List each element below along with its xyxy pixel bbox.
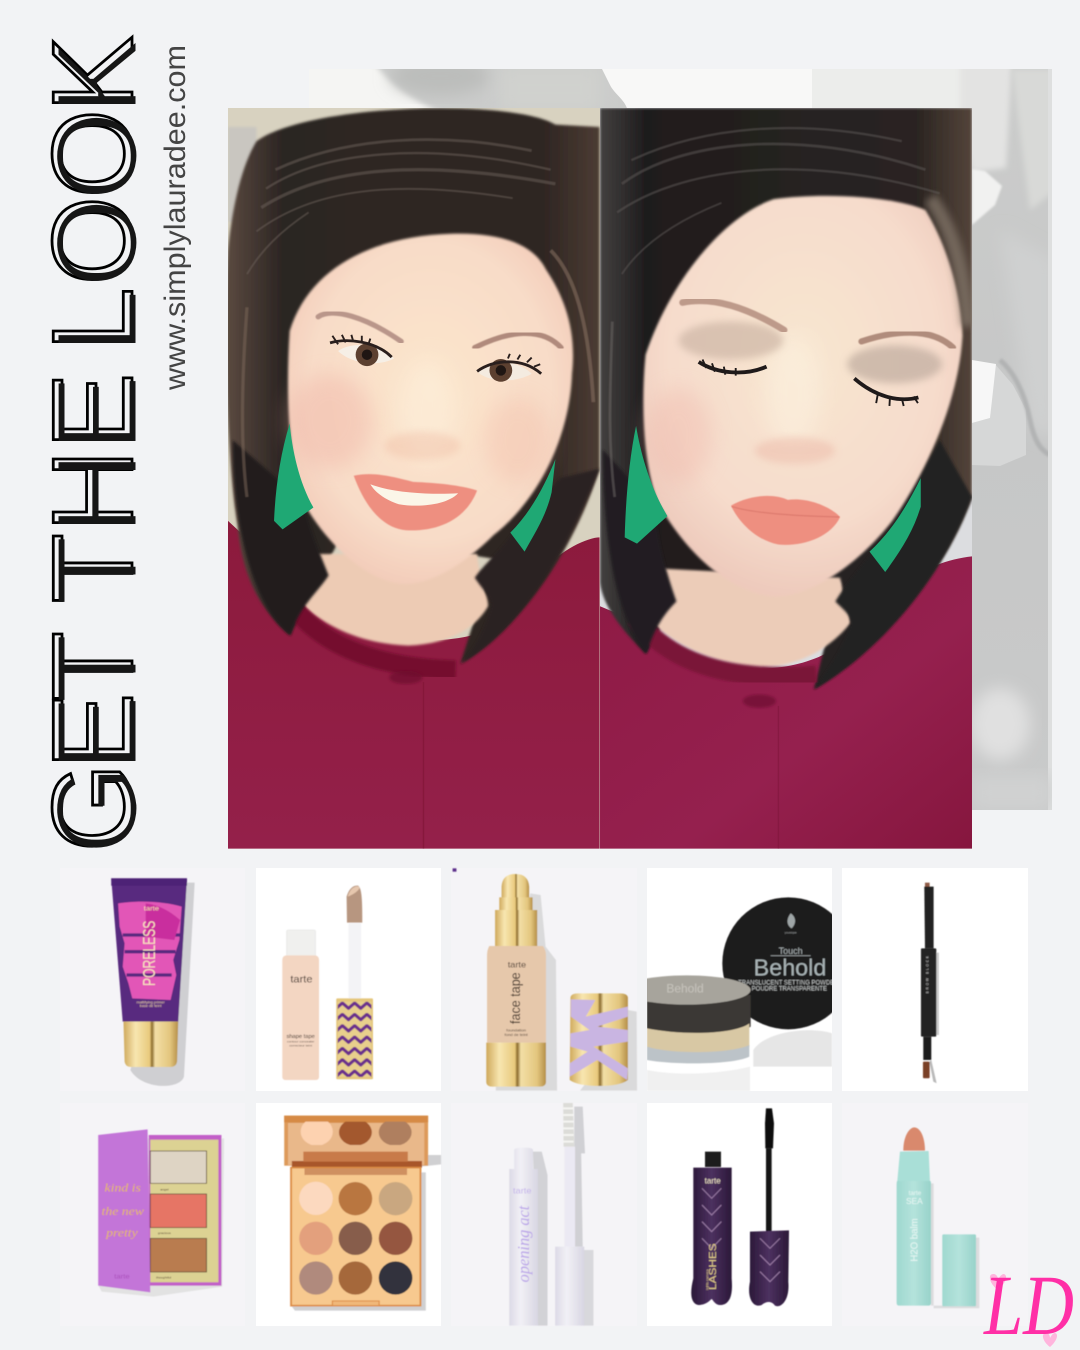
product: behold translucent powder: POUDRE TRANSPARENTE	[752, 987, 827, 993]
icon: pink heart bottom	[1043, 1333, 1057, 1347]
product: opening act lash primer: opening act	[515, 1205, 533, 1282]
product: shape tape concealer: shape tape	[286, 1034, 315, 1040]
product: lights camera lashes mascara: lights camera	[705, 1268, 709, 1290]
product: face tape foundation: fond de teint	[505, 1032, 529, 1037]
products row two, right two	[691, 1108, 979, 1308]
product: face tape foundation: face tape	[507, 972, 523, 1024]
product: h2o balm crayon: SEA	[906, 1196, 923, 1206]
product: behold translucent powder: TRANSLUCENT SETTING POWDER	[738, 981, 839, 987]
product: brow pencil: BROW BLOCK	[925, 955, 929, 993]
product: opening act lash primer: tarte	[513, 1186, 532, 1196]
title: GET THE LOOK: GET THE LOOK	[30, 36, 157, 852]
product: blush palette: kind is	[105, 1181, 141, 1194]
product: shape tape concealer: correcteur teint	[289, 1044, 312, 1048]
left portrait: smiling	[226, 108, 600, 849]
product: opening act lash primer	[509, 1103, 593, 1326]
product: blush palette: angel	[160, 1188, 169, 1191]
product: h2o balm crayon: H2O balm	[909, 1218, 920, 1262]
product: shape tape concealer	[282, 886, 373, 1080]
product: face tape foundation: foundation	[506, 1028, 526, 1033]
product: poreless primer tube: mattifying primer	[137, 1001, 166, 1004]
product: eyeshadow palette	[284, 1116, 441, 1311]
product: h2o balm crayon	[897, 1127, 979, 1308]
product: poreless primer tube	[111, 878, 195, 1086]
product: face tape foundation: tarte	[508, 960, 526, 970]
product: face tape foundation	[453, 868, 637, 1091]
product: shape tape concealer: contour concealer	[287, 1040, 315, 1044]
product: behold translucent powder: Behold	[754, 954, 826, 980]
product: poreless primer tube: PORELESS	[140, 921, 159, 986]
product tile backgrounds	[60, 868, 1028, 1326]
products row two, left three	[98, 1103, 593, 1326]
product: blush palette: pretty	[105, 1226, 138, 1239]
product: h2o balm crayon: tarte	[909, 1190, 922, 1197]
product: blush palette: gracious	[158, 1231, 171, 1235]
right portrait: eyes closed	[600, 108, 972, 849]
product: lights camera lashes mascara: tarte	[705, 1177, 721, 1186]
product: poreless primer tube: tarte	[144, 905, 159, 913]
grey watercolor backdrop	[376, 69, 1052, 810]
product: behold translucent powder: Touch	[779, 946, 803, 956]
title: GET THE LOOK: GET THE LOOK	[32, 38, 162, 855]
product: behold translucent powder: Behold	[666, 982, 704, 996]
product: behold translucent powder	[647, 896, 832, 1091]
product: blush palette: thoughtful	[156, 1276, 172, 1280]
product: lights camera lashes mascara: LASHES	[708, 1243, 719, 1290]
photo: face before and after	[226, 108, 972, 849]
product: lights camera lashes mascara	[691, 1108, 789, 1306]
products row one, right two	[623, 883, 939, 1091]
product: poreless primer tube: base de teint	[140, 1004, 162, 1008]
logo: LD hearts monogram	[982, 1257, 1074, 1350]
product: blush palette: the new	[101, 1204, 144, 1218]
website url: www.simplylauradee.com	[159, 45, 192, 391]
product: blush palette	[98, 1129, 224, 1297]
product: behold translucent powder: younique	[785, 931, 797, 935]
product: brow pencil	[921, 883, 939, 1083]
product: shape tape concealer: tarte	[290, 975, 313, 985]
icon: pink heart left	[990, 1274, 1006, 1290]
product: blush palette: tarte	[114, 1273, 130, 1280]
products row one, left three	[111, 868, 637, 1091]
